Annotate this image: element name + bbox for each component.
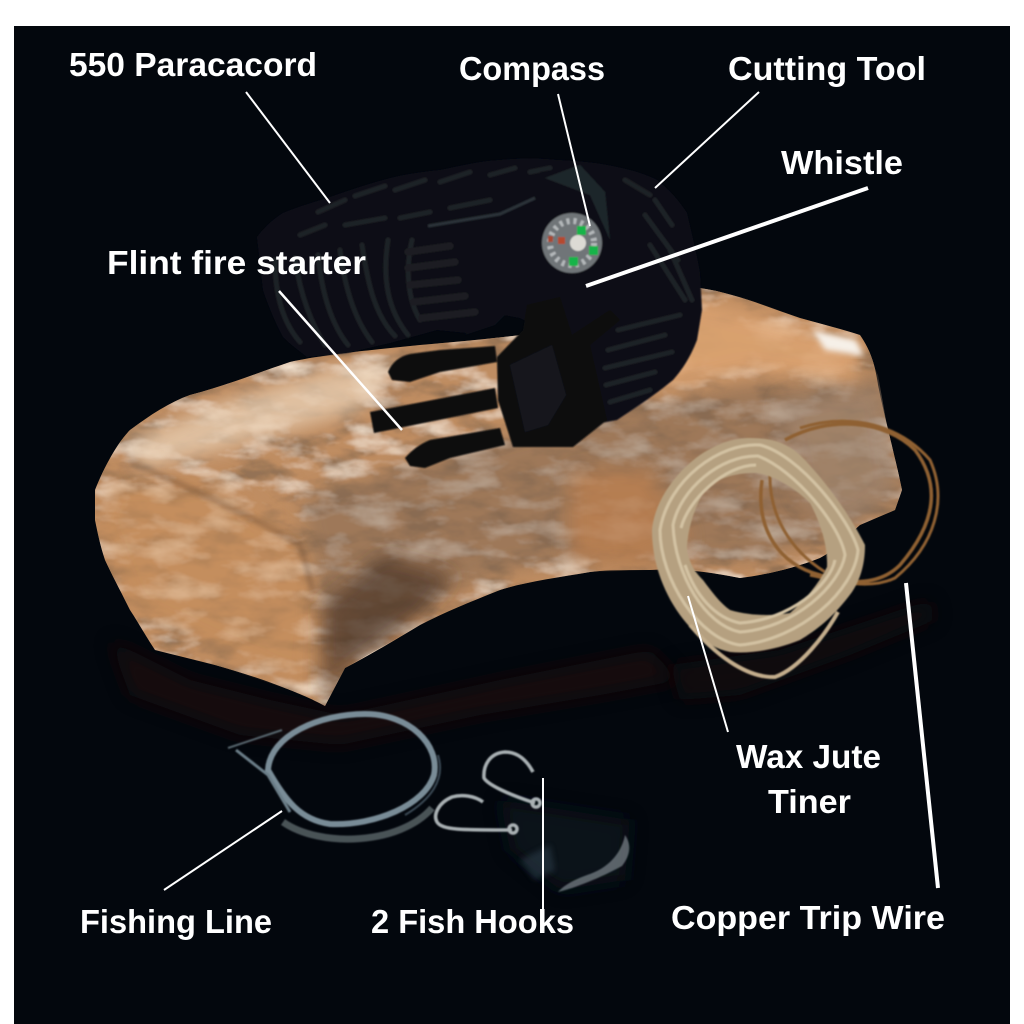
fishing line coil <box>228 714 440 839</box>
label: Flint fire starter <box>107 244 402 430</box>
reflection highlight <box>558 835 629 892</box>
label: Copper Trip Wire: Copper Trip Wire <box>671 899 945 936</box>
label: Copper Trip Wire <box>671 583 945 936</box>
plastic buckle <box>425 165 615 335</box>
whistle buckle body <box>497 297 620 447</box>
label: 2 Fish Hooks: 2 Fish Hooks <box>371 903 574 940</box>
label: Fishing Line: Fishing Line <box>80 903 272 940</box>
reflection on dark table <box>110 600 935 890</box>
compass <box>536 207 608 279</box>
wax jute cord <box>652 438 865 677</box>
label: Wax Jute Tiner: Wax Jute <box>736 738 881 775</box>
flint rod <box>370 388 498 433</box>
paracord weave <box>275 168 692 402</box>
label: Flint fire starter: Flint fire starter <box>107 244 366 281</box>
label: Cutting Tool: Cutting Tool <box>728 50 926 87</box>
label: Whistle: Whistle <box>781 144 903 181</box>
label: Fishing Line <box>80 811 282 940</box>
label: Wax Jute Tiner: Tiner <box>768 783 851 820</box>
label: Cutting Tool <box>655 50 926 188</box>
bracelet <box>257 158 702 468</box>
paracord band silhouette <box>257 158 702 425</box>
copper trip wire <box>761 421 938 584</box>
label: 550 Paracacord <box>69 46 330 203</box>
rock dark chunk <box>322 555 455 700</box>
rock <box>95 288 902 706</box>
rock pale top <box>130 360 400 470</box>
rock upper right <box>640 300 860 390</box>
label: Compass <box>459 50 605 226</box>
fish hooks <box>436 752 540 833</box>
label: Whistle <box>586 144 903 286</box>
label: Compass: Compass <box>459 50 605 87</box>
label: Wax Jute Tiner <box>688 596 881 820</box>
rock shaded middle band <box>300 370 902 660</box>
rock orange patch <box>570 470 690 565</box>
label: 550 Paracacord: 550 Paracacord <box>69 46 317 83</box>
rock left face <box>95 480 315 690</box>
buckle prongs <box>388 346 497 382</box>
